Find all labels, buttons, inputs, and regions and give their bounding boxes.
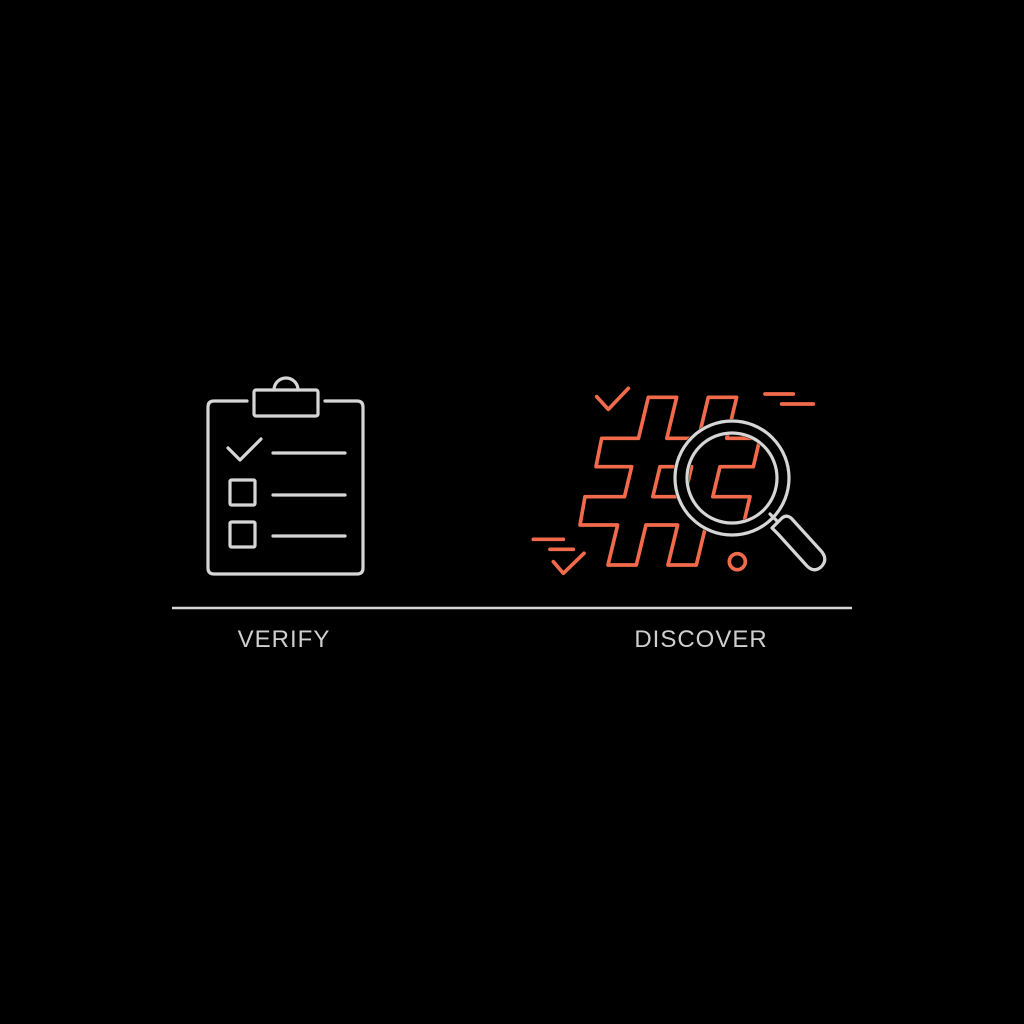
label: VERIFY: VERIFY [238,626,330,653]
baseline divider [172,607,852,609]
label: DISCOVER: DISCOVER [634,626,768,653]
icon: hashtag with magnifier [533,388,825,573]
icon: clipboard checklist [208,378,363,574]
